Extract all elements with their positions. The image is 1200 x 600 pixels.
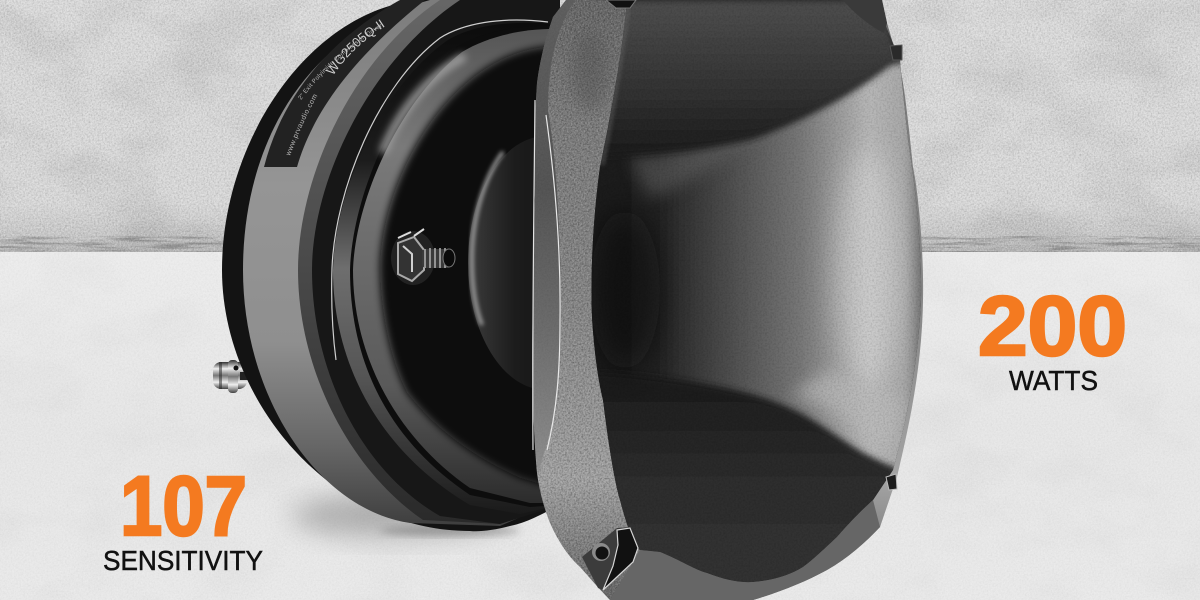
middle panel with bright right side — [590, 60, 930, 480]
dish black interior — [380, 46, 560, 490]
rim white edge line — [533, 100, 535, 450]
model label strip: WG2505Q-II — [326, 19, 384, 74]
mouth grain — [618, 4, 921, 466]
background: concrete floor — [0, 252, 1200, 600]
rim inner line — [546, 115, 560, 450]
icon: top left mounting tab — [606, 0, 636, 8]
black clamp ring — [312, 0, 560, 524]
lighter metal ring — [333, 23, 560, 514]
lower dark panel — [598, 373, 894, 582]
dish rim highlight — [384, 58, 462, 150]
bottom lip of horn — [610, 500, 880, 600]
thin white highlight line — [332, 20, 548, 360]
icon: mounting nut and threaded bolt — [391, 229, 455, 285]
horn waveguide — [530, 0, 930, 600]
compression driver body — [222, 0, 560, 532]
darker grey band — [298, 0, 560, 524]
flange shadow near the top — [572, 32, 608, 112]
bright highlight — [836, 150, 900, 390]
horn silhouette and left flange — [532, 0, 923, 600]
grey metal band — [243, 0, 560, 526]
model label strip — [264, 0, 424, 167]
top right corner panel — [843, 0, 887, 33]
model label strip: 2" Exit Polyimide Compression Driver — [298, 24, 382, 100]
stat number: 200: 200 — [978, 279, 1127, 373]
flange grain — [530, 0, 640, 600]
centre dome — [468, 136, 624, 390]
background: concrete wall — [0, 0, 1200, 254]
icon: chrome BNC connector — [213, 360, 254, 393]
top dark panel — [585, 0, 900, 158]
front dish — [353, 29, 560, 503]
stat label: sensitivity: SENSITIVITY — [103, 545, 263, 576]
icon: upper right notch — [890, 45, 902, 60]
stat label: watts: WATTS — [1009, 365, 1098, 396]
pale crease wedge — [630, 145, 730, 200]
outer rim strip — [533, 0, 575, 473]
stat: 200 watts — [978, 279, 1127, 396]
outer black rear housing — [222, 0, 560, 531]
icon: bottom left mounting hole — [582, 527, 638, 590]
driver floor shadow — [290, 495, 520, 536]
dome highlight — [472, 152, 503, 325]
icon: lower right notch — [886, 474, 897, 490]
model label strip: www.prvaudio.com — [286, 94, 318, 156]
stat: 107 sensitivity — [103, 459, 263, 576]
lower bright patch — [792, 369, 898, 424]
horn mouth interior — [580, 0, 930, 600]
left edge sheen in the mouth — [602, 8, 628, 165]
stat number: 107: 107 — [120, 459, 247, 553]
black line before dish — [350, 26, 560, 507]
inner throat shading — [590, 210, 660, 370]
